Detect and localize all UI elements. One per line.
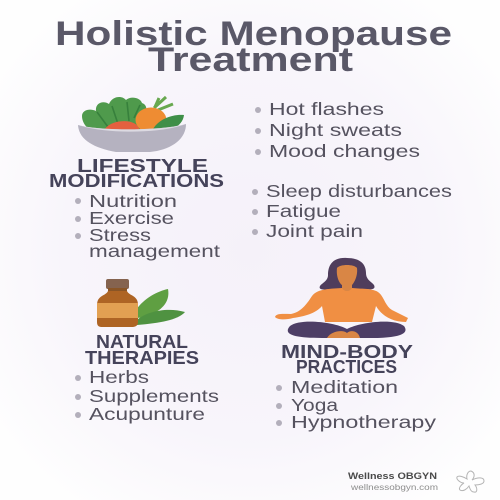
list: lifestyle items: management xyxy=(89,241,220,261)
list: mind-body items: Hypnotherapy xyxy=(291,412,436,432)
footer brand: Wellness OBGYN xyxy=(348,471,437,481)
footer brand: wellnessobgyn.com xyxy=(350,483,438,492)
heading: mind-body practices: MIND-BODY xyxy=(281,341,414,362)
list: lifestyle items: Nutrition xyxy=(89,191,177,211)
list: symptoms two: Sleep disturbances xyxy=(266,181,452,201)
list: symptoms two: Joint pain xyxy=(266,221,363,241)
icon: flower logo xyxy=(457,471,484,492)
heading: natural therapies: THERAPIES xyxy=(85,347,199,368)
heading: lifestyle modifications: LIFESTYLE xyxy=(77,155,208,176)
list: mind-body items xyxy=(276,377,436,432)
heading: mind-body practices: PRACTICES xyxy=(296,356,397,377)
list: lifestyle items: Exercise xyxy=(89,208,174,228)
list: symptoms two xyxy=(252,181,452,241)
footer brand xyxy=(348,471,438,492)
title: Treatment xyxy=(148,41,353,79)
list: natural therapies items: Supplements xyxy=(89,386,219,406)
heading: natural therapies: NATURAL xyxy=(96,331,188,352)
list: lifestyle items: Stress xyxy=(89,225,151,245)
heading: lifestyle modifications: MODIFICATIONS xyxy=(49,170,224,191)
icon: vegetable bowl xyxy=(78,97,186,152)
title: Holistic Menopause xyxy=(55,15,452,53)
list: symptoms one: Night sweats xyxy=(269,120,402,140)
heading: mind-body practices xyxy=(281,341,414,377)
heading: lifestyle modifications xyxy=(49,155,224,191)
list: symptoms one xyxy=(255,99,420,161)
list: symptoms one: Mood changes xyxy=(269,141,420,161)
list: symptoms one: Hot flashes xyxy=(269,99,384,119)
heading: natural therapies xyxy=(85,331,199,368)
list: lifestyle items xyxy=(75,191,220,261)
list: mind-body items: Yoga xyxy=(291,395,338,415)
list: natural therapies items: Acupunture xyxy=(89,404,205,424)
icon: meditating woman xyxy=(275,258,408,338)
list: mind-body items: Meditation xyxy=(291,377,398,397)
title xyxy=(55,15,452,79)
icon: herbal bottle and leaves xyxy=(97,279,185,327)
list: symptoms two: Fatigue xyxy=(266,201,341,221)
list: natural therapies items xyxy=(75,367,219,424)
list: natural therapies items: Herbs xyxy=(89,367,149,387)
